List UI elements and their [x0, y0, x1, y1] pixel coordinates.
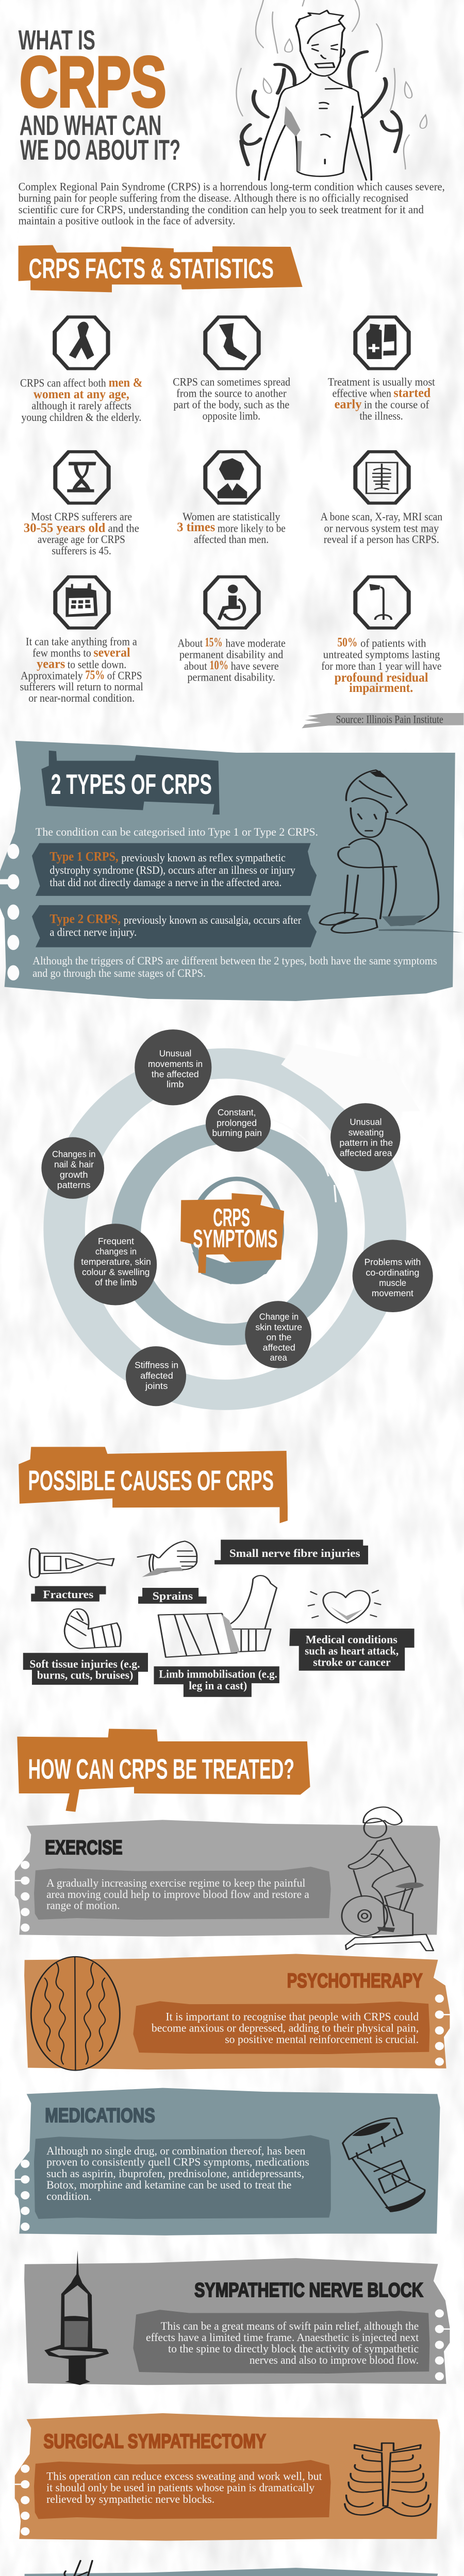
- bubble: skin texture: [245, 1301, 311, 1368]
- fact: impairment: of patients with: [360, 637, 426, 650]
- center label: CRPS symptoms: CRPS: [213, 1204, 250, 1232]
- fact: spread: from the source to another: [176, 387, 287, 400]
- fact: treatment early: early: [335, 397, 361, 411]
- fact: recovery time: to settle down.: [68, 658, 126, 671]
- text box: medications: condition.: [46, 2190, 92, 2202]
- panel: 2 types of CRPS: 2 TYPES OF CRPS: [51, 769, 212, 800]
- bubble: burning pain: prolonged: [217, 1118, 257, 1128]
- bubble: nail and hair: nail & hair: [54, 1160, 94, 1170]
- text box: sympathetic nerve block: [133, 2310, 429, 2374]
- fact: recovery time: several: [93, 645, 130, 659]
- icon: leg in cast: [158, 1575, 277, 1657]
- fact: treatment early: started: [393, 385, 430, 400]
- fact: spread: part of the body, such as the: [173, 398, 289, 411]
- bubble: unusual movements: [135, 1029, 211, 1105]
- title: WHAT IS: [19, 24, 95, 56]
- box: type 2: previously known as causalgia, occurs after: [124, 914, 302, 926]
- chart: CRPS symptoms rings: [41, 1029, 433, 1406]
- box: type 1: previously known as reflex sympathetic: [121, 852, 286, 864]
- bubble: temperature changes: changes in: [95, 1247, 137, 1257]
- fact: age: Most CRPS sufferers are: [31, 511, 132, 523]
- text: triggers: and go through the same stages of CRPS.: [32, 967, 206, 979]
- illustration: ribcage: [345, 2443, 430, 2516]
- bubble: muscle movement: Problems with: [364, 1258, 421, 1267]
- illustration: brain: [31, 1957, 120, 2071]
- bubble: temperature changes: colour & swelling: [82, 1267, 150, 1277]
- heading: medications: MEDICATIONS: [45, 2104, 155, 2126]
- fact: recovery time: years: [37, 656, 65, 671]
- fact: recovery time: or near-normal condition.: [28, 692, 135, 704]
- bubble: burning pain: burning pain: [212, 1128, 262, 1138]
- bubble: stiffness: joints: [145, 1381, 168, 1391]
- fact: disability: permanent disability and: [179, 648, 283, 661]
- illustration: girl hugging knees: [320, 770, 463, 933]
- bubble: stiffness: Stiffness in: [135, 1361, 178, 1370]
- bubble: nail and hair: [41, 1137, 104, 1199]
- panel: 2 types of CRPS: [0, 741, 463, 1001]
- bubble: nail and hair: growth: [60, 1170, 88, 1180]
- fact: men and women: men &: [109, 375, 143, 389]
- fact: disability: about: [184, 660, 207, 672]
- text box: psychotherapy: [133, 2001, 429, 2054]
- fact: recovery time: 75%: [85, 667, 105, 682]
- label: limb immobilisation: Limb immobilisation (e.g.: [159, 1668, 277, 1681]
- fact: impairment: impairment.: [349, 681, 413, 695]
- text box: medications: [34, 2135, 331, 2219]
- fact: age: and the: [108, 522, 139, 535]
- fact: men and women: young children & the elderly.: [21, 411, 141, 423]
- fact: men and women: women at any age,: [34, 386, 129, 401]
- fact: disability: About: [177, 637, 203, 650]
- bubble: burning pain: Constant,: [218, 1108, 256, 1117]
- fact: age: [24, 452, 139, 557]
- bubble: unusual movements: the affected: [152, 1070, 199, 1079]
- label: sprains: Sprains: [153, 1590, 193, 1602]
- bubble: muscle movement: co-ordinating: [366, 1268, 419, 1278]
- bubble: skin texture: affected: [263, 1343, 295, 1353]
- text: triggers: [32, 955, 437, 979]
- icon: bandaged arm: [64, 1609, 121, 1649]
- fact: disability: [177, 577, 286, 684]
- fact: women: more likely to be: [218, 522, 286, 535]
- text box: exercise: area moving could help to improve blood flow and restore a: [46, 1888, 309, 1901]
- illustration: man in burning pain: [236, 0, 427, 180]
- label: soft tissue injuries: [23, 1653, 148, 1685]
- bubble: skin texture: skin texture: [255, 1323, 302, 1332]
- fact: women: Women are statistically: [183, 511, 280, 523]
- panel: medications: [15, 2088, 440, 2235]
- bubble: sweating: sweating: [349, 1128, 384, 1138]
- panel: psychotherapy: [24, 1954, 450, 2071]
- intro paragraph: [19, 180, 445, 227]
- fact: age: average age for CRPS: [38, 533, 125, 546]
- bubble: temperature changes: Frequent: [98, 1236, 134, 1246]
- fact: disability: have severe: [231, 660, 279, 672]
- fact: women: affected than men.: [194, 533, 269, 546]
- fact: men and women: although it rarely affects: [31, 399, 131, 412]
- fact: recovery time: few months to: [32, 647, 91, 659]
- icon: fist: [138, 1541, 197, 1577]
- panel: surgical sympathectomy: [15, 2413, 440, 2540]
- text box: exercise: A gradually increasing exercise regime to keep the painful: [46, 1877, 305, 1889]
- label: small nerve fibre injuries: Small nerve fibre injuries: [229, 1547, 360, 1560]
- illustration: pill bottle: [343, 2118, 425, 2212]
- fact: spread: [173, 317, 290, 422]
- fact: recovery time: of CRPS: [107, 670, 142, 682]
- box: type 1: that did not directly damage a nerve in the affected area.: [49, 876, 281, 889]
- bubble: stiffness: affected: [140, 1371, 173, 1381]
- panel: possible causes: [19, 1447, 415, 1697]
- fact: recovery time: sufferers will return to normal: [20, 681, 143, 693]
- panel: exercise: [15, 1807, 440, 1951]
- box: type 2: a direct nerve injury.: [49, 926, 137, 939]
- bubble: unusual movements: limb: [167, 1079, 184, 1090]
- fact: age: sufferers is 45.: [52, 545, 111, 557]
- label: medical conditions: stroke or cancer: [313, 1656, 391, 1669]
- fact: spread: opposite limb.: [203, 410, 260, 422]
- illustration: syringe: [44, 2250, 109, 2385]
- bubble: skin texture: area: [270, 1353, 287, 1363]
- title: [19, 24, 180, 166]
- label: fractures: [31, 1586, 106, 1601]
- center label: CRPS symptoms: [180, 1179, 284, 1284]
- bubble: skin texture: Change in: [259, 1312, 299, 1322]
- label: limb immobilisation: [154, 1666, 279, 1697]
- heading: CRPS facts and statistics: [19, 245, 303, 292]
- text box: surgical sympathectomy: [34, 2460, 331, 2519]
- label: limb immobilisation: leg in a cast): [189, 1680, 247, 1692]
- text: condition intro: The condition can be categorised into Type 1 or Type 2 CRPS.: [36, 826, 318, 838]
- fact: spread: CRPS can sometimes spread: [173, 376, 290, 388]
- bubble: burning pain: [206, 1095, 271, 1151]
- panel: sympathetic nerve block: [24, 2250, 450, 2385]
- illustration: spine: [57, 2561, 94, 2576]
- label: fractures: Fractures: [43, 1588, 93, 1601]
- bubble: stiffness: [126, 1346, 186, 1406]
- heading: surgical sympathectomy: SURGICAL SYMPATHECTOMY: [43, 2430, 266, 2452]
- text box: medications: Botox, morphine and ketamine can be used to treat the: [46, 2179, 291, 2191]
- label: soft tissue injuries: Soft tissue injuries (e.g.: [29, 1658, 140, 1670]
- heading: possible causes of CRPS: [19, 1447, 288, 1523]
- text box: medications: Although no single drug, or combination thereof, has been: [46, 2145, 305, 2157]
- bubble: temperature changes: of the limb: [95, 1278, 137, 1287]
- fact: women: [177, 452, 286, 546]
- label: medical conditions: such as heart attack,: [305, 1645, 399, 1657]
- fact: treatment early: [328, 317, 435, 422]
- label: soft tissue injuries: burns, cuts, bruises): [37, 1669, 133, 1682]
- source ribbon: [302, 713, 463, 728]
- bubble: temperature changes: temperature, skin: [81, 1257, 151, 1267]
- intro paragraph: maintain a positive outlook in the face of adversity.: [19, 214, 235, 227]
- bubble: sweating: affected area: [340, 1148, 392, 1158]
- box: type 2: [32, 905, 317, 947]
- fact: men and women: [20, 317, 143, 423]
- title: AND WHAT CAN: [20, 109, 161, 141]
- heading: 2 types of CRPS: [41, 751, 220, 815]
- fact: disability: have moderate: [225, 637, 286, 650]
- heading: exercise: EXERCISE: [45, 1836, 123, 1858]
- fact: disability: permanent disability.: [187, 671, 275, 684]
- box: type 1: [32, 843, 317, 896]
- fact: disability: 15%: [205, 635, 223, 649]
- icon: heart: [308, 1590, 380, 1623]
- illustration: woman on exercise bike: [342, 1807, 434, 1951]
- bubble: unusual movements: movements in: [148, 1059, 203, 1069]
- fact: disability: 10%: [209, 657, 228, 672]
- fact: impairment: [321, 577, 441, 695]
- bubble: nail and hair: Changes in: [52, 1149, 95, 1159]
- fact: men and women: CRPS can affect both: [20, 377, 106, 389]
- fact: age: 30-55 years old: [24, 520, 106, 535]
- fact: recovery time: Approximately: [21, 670, 83, 682]
- bubble: sweating: [330, 1103, 401, 1171]
- heading: how can CRPS be treated: [17, 1729, 310, 1812]
- panel: spinal cord stimulation: [24, 2561, 450, 2576]
- fact: scans: [321, 452, 442, 546]
- fact: recovery time: It can take anything from a: [26, 635, 137, 648]
- fact: treatment early: effective when: [333, 387, 391, 399]
- fact: women: 3 times: [177, 520, 215, 534]
- bubble: muscle movement: movement: [372, 1289, 413, 1298]
- box: type 1: dystrophy syndrome (RSD), occurs after an illness or injury: [49, 864, 295, 876]
- fact: treatment early: the illness.: [359, 410, 403, 422]
- label: medical conditions: [289, 1629, 415, 1671]
- label: sprains: [138, 1588, 207, 1604]
- bubble: unusual movements: Unusual: [159, 1049, 191, 1059]
- box: type 1: Type 1 CRPS,: [49, 849, 119, 863]
- text: WE DO ABOUT IT?: [20, 134, 180, 166]
- icon: crutch: [29, 1549, 114, 1578]
- bubble: muscle movement: muscle: [379, 1278, 406, 1288]
- chart: CRPS symptoms rings: SYMPTOMS: [193, 1225, 277, 1253]
- label: small nerve fibre injuries: [214, 1540, 368, 1565]
- bubble: skin texture: on the: [267, 1333, 291, 1343]
- bubble: sweating: Unusual: [350, 1117, 382, 1127]
- bubble: muscle movement: [353, 1240, 433, 1312]
- text box: surgical sympathectomy: This operation can reduce excess sweating and work well, but: [46, 2470, 322, 2483]
- fact: recovery time: [20, 577, 143, 704]
- bubble: nail and hair: patterns: [57, 1180, 91, 1190]
- fact: impairment: 50%: [337, 635, 357, 649]
- text box: medications: such as aspirin, ibuprofen, prednisolone, antidepressants,: [46, 2167, 304, 2180]
- fact: treatment early: in the course of: [364, 398, 429, 411]
- panel: facts grid: [20, 317, 442, 704]
- bubble: temperature changes: [74, 1224, 157, 1306]
- text box: exercise: [34, 1867, 331, 1920]
- bubble: sweating: pattern in the: [339, 1138, 393, 1148]
- text box: exercise: range of motion.: [46, 1899, 120, 1911]
- title: CRPS: [20, 42, 167, 122]
- box: type 2: Type 2 CRPS,: [49, 911, 121, 926]
- text box: surgical sympathectomy: relieved by sympathetic nerve blocks.: [46, 2493, 214, 2505]
- label: medical conditions: Medical conditions: [306, 1633, 397, 1646]
- text box: surgical sympathectomy: it should only be used in patients whose pain is dramatically: [46, 2481, 314, 2494]
- text box: medications: proven to consistently quell CRPS symptoms, medications: [46, 2156, 309, 2168]
